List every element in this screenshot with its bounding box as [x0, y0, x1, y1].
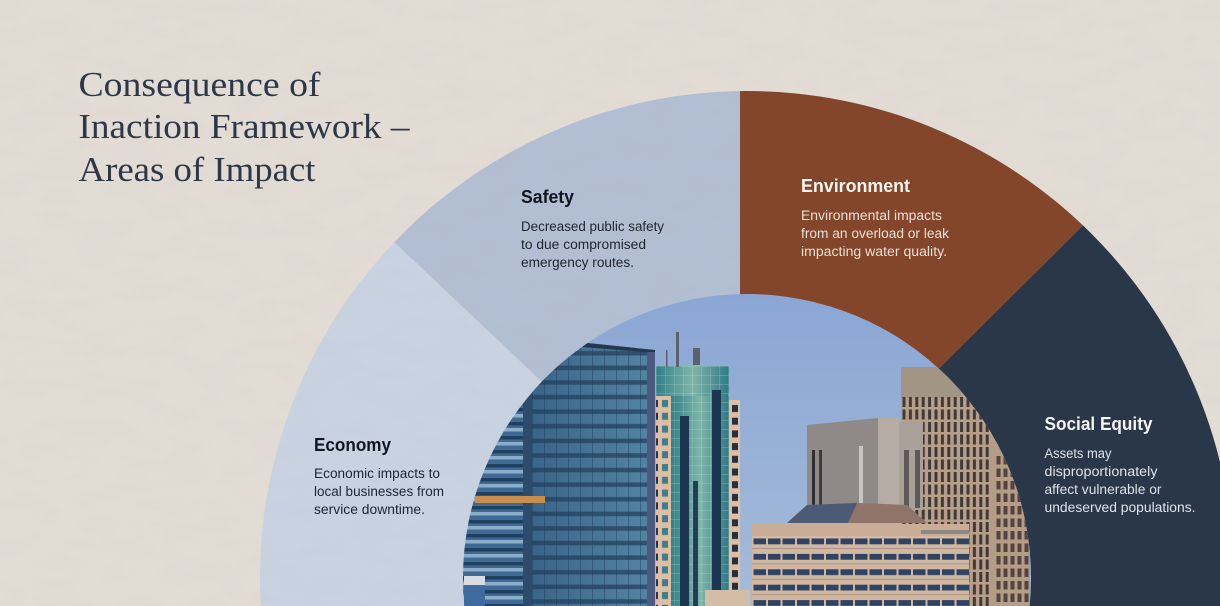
sky	[460, 290, 1040, 606]
low office building	[752, 524, 969, 606]
text: Social Equity: undeserved populations.	[1044, 500, 1196, 515]
billboard	[464, 576, 485, 606]
glass tower left wing	[463, 390, 533, 606]
text: Safety	[521, 187, 664, 270]
text: Economy	[314, 435, 444, 517]
brown tall tower	[901, 367, 1030, 606]
title: Areas of Impact	[78, 150, 316, 189]
text: Social Equity	[1044, 414, 1196, 515]
text: Social Equity: Assets may	[1044, 446, 1112, 461]
roof	[787, 503, 927, 523]
text: Environment: from an overload or leak	[801, 226, 949, 241]
small foreground building	[705, 590, 750, 606]
grey concrete building	[807, 418, 923, 510]
text: Economy: Economic impacts to	[314, 466, 440, 481]
text: Economy: Economy	[314, 435, 391, 455]
text: Environment: Environmental impacts	[801, 208, 942, 223]
segment: Social Equity	[939, 225, 1220, 606]
antennas	[666, 332, 700, 367]
text: Safety: emergency routes.	[521, 255, 634, 270]
text: Safety: Safety	[521, 187, 574, 207]
text: Environment	[801, 176, 949, 259]
text: Economy: local businesses from	[314, 484, 444, 499]
segment: Safety	[394, 91, 740, 382]
title: Inaction Framework –	[78, 107, 410, 146]
text: Social Equity: affect vulnerable or	[1044, 482, 1162, 497]
glass tower main	[532, 343, 655, 606]
title	[78, 65, 410, 189]
text: Environment: impacting water quality.	[801, 244, 947, 259]
text: Safety: to due compromised	[521, 237, 646, 252]
title: Consequence of	[78, 65, 321, 104]
text: Social Equity: disproportionately	[1044, 464, 1158, 479]
text: Economy: service downtime.	[314, 502, 425, 517]
city skyline photo	[460, 290, 1040, 606]
beige tower behind	[656, 394, 740, 606]
crane	[475, 496, 545, 503]
text: Safety: Decreased public safety	[521, 219, 664, 234]
text: Social Equity: Social Equity	[1044, 414, 1152, 434]
text: Environment: Environment	[801, 176, 910, 196]
semicircle diagram	[260, 91, 1220, 606]
segment: Economy	[260, 242, 542, 606]
teal cylindrical tower	[656, 366, 729, 606]
segment: Environment	[740, 91, 1083, 368]
